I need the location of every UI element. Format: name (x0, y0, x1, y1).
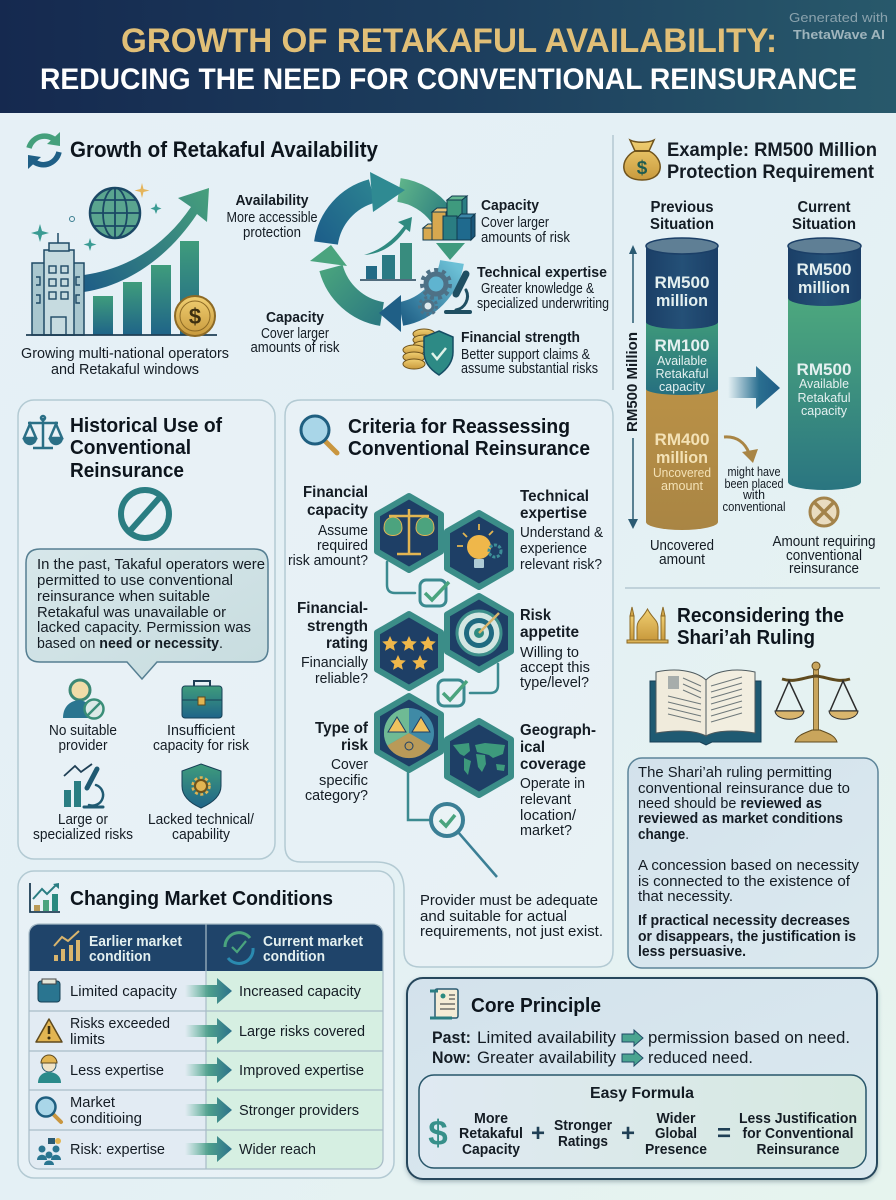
cylinder: previous situation: RM100 (654, 336, 710, 355)
cycle labels: assume substantial risks (461, 361, 598, 377)
heading (677, 605, 844, 649)
term: capacity: Retakaful (459, 1126, 523, 1142)
note: might have been placed: might have (728, 465, 781, 479)
right criteria labels: type/level? (520, 675, 589, 691)
text box: conventional reinsurance due to (638, 781, 850, 797)
label: capability (172, 827, 231, 843)
conclusion text: Provider must be adequate (420, 893, 598, 909)
hexagon: type of risk (377, 696, 441, 770)
text box: that necessity. (638, 889, 733, 905)
panel: changing market conditions (18, 871, 394, 1178)
check badge (438, 680, 467, 706)
statement: now: Now: (432, 1049, 471, 1067)
row 3 icon: worker (38, 1055, 61, 1083)
plus: + (531, 1120, 545, 1147)
hexagon: technical expertise (447, 513, 511, 587)
icon: capacity blocks (423, 196, 475, 240)
icon: scales (24, 416, 62, 448)
speech bubble: permitted to use conventional (37, 573, 233, 589)
cylinder: current situation: capacity (801, 403, 847, 418)
label: Insufficient (167, 723, 235, 739)
column heading: current (792, 199, 856, 233)
term: ratings: Ratings (558, 1134, 608, 1150)
illustration: open book (650, 670, 761, 745)
heading: Reinsurance (70, 460, 184, 482)
panel: RM500 million example (624, 139, 877, 577)
icon: refresh arrows (28, 132, 60, 169)
label: uncovered amount (650, 538, 714, 568)
row 5 text: Wider reach (239, 1142, 316, 1158)
row 2 text: Risks exceeded (70, 1016, 170, 1032)
note: might have been placed: with (742, 488, 765, 502)
illustration: rising bars, building, globe: $ (189, 304, 201, 329)
statement: now (432, 1049, 753, 1067)
heading: Criteria for Reassessing (348, 416, 570, 438)
cylinder: previous situation: RM400 (654, 430, 710, 449)
magnifier check (431, 804, 463, 836)
cylinder: previous situation (646, 238, 718, 530)
right criteria labels: Technical (520, 488, 589, 505)
note: might have been placed: conventional (722, 500, 786, 514)
statement: past: Past: (432, 1029, 471, 1047)
left criteria labels: specific (319, 773, 368, 789)
cylinder: current situation: Available (799, 376, 849, 391)
cycle diagram (310, 172, 465, 332)
text box (628, 758, 878, 968)
watermark: ThetaWave AI (793, 27, 885, 42)
row 4 text: conditioing (70, 1111, 142, 1127)
header icon: current (225, 933, 253, 963)
cycle labels: amounts of risk (481, 230, 571, 246)
icon: money bag: $ (637, 158, 648, 179)
label: uncovered amount: Uncovered (650, 538, 714, 554)
left criteria labels: capacity (307, 502, 368, 519)
text box: is connected to the existence of (638, 874, 851, 890)
icon: chart and microscope (64, 764, 103, 807)
label: Large or (58, 812, 108, 828)
label: provider (58, 738, 108, 754)
speech bubble: Retakaful was unavailable or (37, 605, 226, 621)
cylinder: current situation: RM500 (796, 360, 852, 379)
cylinder: previous situation: Available (657, 353, 707, 368)
text box: If practical necessity decreases (638, 913, 850, 929)
icon: magnifier (301, 416, 337, 453)
speech bubble: reinsurance when suitable (37, 589, 210, 605)
cylinder: current situation: Retakaful (798, 390, 851, 405)
icon: gears and microscope (420, 270, 470, 314)
row 3 text: Less expertise (70, 1063, 164, 1079)
statement: past: Limited availability (477, 1029, 617, 1047)
heading: Protection Requirement (667, 161, 874, 183)
text box: A concession based on necessity (638, 858, 860, 874)
label: amount requiring conventional reinsurance (772, 534, 876, 577)
equals: = (717, 1120, 731, 1147)
cycle labels: Greater knowledge & (481, 281, 594, 297)
formula box: Easy Formula (590, 1085, 694, 1102)
icon: gear shield (182, 764, 221, 808)
arrow: gold curve (724, 437, 758, 463)
column heading: previous (650, 199, 714, 233)
left criteria labels: Financial (303, 484, 368, 501)
term: presence: Global (655, 1126, 697, 1142)
left criteria labels: Financially (301, 655, 369, 671)
check badge (420, 580, 449, 606)
result: for Conventional (742, 1126, 854, 1142)
right criteria labels: Willing to (520, 645, 579, 661)
result (739, 1111, 857, 1158)
cylinder: previous situation: Retakaful (656, 366, 709, 381)
icon: mosque (627, 607, 668, 643)
text box: change. (638, 827, 689, 843)
left criteria labels: risk amount? (288, 553, 368, 569)
column heading: current: Situation (792, 216, 856, 233)
cycle labels: Availability (236, 193, 308, 209)
row 1 arrow (185, 978, 232, 1004)
hexagon: financial capacity (377, 496, 441, 570)
icon: briefcase (182, 681, 222, 718)
right criteria labels: experience (520, 541, 587, 557)
note: might have been placed: been placed (724, 477, 784, 491)
right criteria labels: coverage (520, 756, 586, 773)
term: ratings: Stronger (554, 1118, 612, 1134)
text box: or disappears, the justification is (638, 929, 856, 945)
label (33, 812, 133, 843)
left criteria labels: reliable? (315, 671, 368, 687)
term: capacity: More (474, 1111, 508, 1127)
row 1 text: Increased capacity (239, 984, 362, 1000)
row 5 text (70, 1142, 316, 1158)
hexagon: risk appetite (447, 596, 511, 670)
column heading: current: Current (798, 199, 851, 216)
cycle labels: amounts of risk (250, 340, 340, 356)
row 3 arrow (185, 1057, 232, 1083)
title line 1: GROWTH OF RETAKAFUL AVAILABILITY: (121, 22, 777, 60)
header text: current (263, 934, 363, 965)
panel: criteria for reassessing (285, 400, 613, 967)
dimension arrow: RM500 million (624, 245, 641, 529)
column heading: previous: Situation (650, 216, 714, 233)
hexagon: financial-strength rating (377, 614, 441, 688)
icon: dollar: $ (428, 1114, 448, 1153)
heading: Core Principle (471, 995, 601, 1017)
right criteria labels: accept this (520, 660, 590, 676)
cycle labels: Capacity (266, 310, 324, 326)
comparison table (29, 924, 383, 1169)
panel: core principle (407, 978, 877, 1179)
icon: no provider (63, 680, 104, 718)
connector lines (387, 562, 498, 877)
header text: current: Current market (263, 934, 363, 950)
cycle labels (226, 193, 609, 377)
text box: less persuasive. (638, 944, 746, 960)
header text: earlier: Earlier market (89, 934, 182, 950)
panel: growth of retakaful availability (21, 132, 609, 378)
left criteria labels: risk (341, 737, 368, 754)
note: might have been placed (722, 465, 786, 514)
cycle labels: Cover larger (481, 215, 549, 231)
heading: Conventional Reinsurance (348, 438, 590, 460)
result: Less Justification (739, 1111, 857, 1127)
row 4 text: Market (70, 1095, 115, 1111)
left criteria labels: category? (305, 788, 368, 804)
row 2 text: limits (70, 1032, 105, 1048)
cycle labels: Better support claims & (461, 347, 590, 363)
header banner (0, 0, 896, 113)
term: ratings (554, 1118, 612, 1150)
left criteria labels: Type of (315, 720, 369, 737)
text box: The Shari’ah ruling permitting (638, 765, 832, 781)
statement: past: permission based on need. (648, 1029, 850, 1047)
right criteria labels: location/ (520, 808, 577, 824)
label (148, 812, 255, 843)
label: specialized risks (33, 827, 133, 843)
icon: money bag (624, 140, 660, 180)
row 4 arrow (185, 1097, 232, 1123)
left criteria labels: Assume (318, 523, 368, 539)
conclusion text: and suitable for actual (420, 909, 567, 925)
right criteria labels: Operate in (520, 776, 585, 792)
heading: Example: RM500 Million (667, 139, 877, 161)
right criteria labels: market? (520, 823, 572, 839)
cycle labels: protection (243, 225, 301, 241)
conclusion text: requirements, not just exist. (420, 924, 603, 940)
icon: crossed circle (810, 498, 838, 526)
speech bubble: lacked capacity. Permission was (37, 620, 251, 636)
label: capacity for risk (153, 738, 250, 754)
cycle labels: Cover larger (261, 326, 329, 342)
cylinder: previous situation: Uncovered (653, 465, 711, 480)
formula box (419, 1075, 866, 1168)
cycle labels: specialized underwriting (477, 296, 609, 312)
row 1 icon: wallet (38, 979, 60, 1002)
cylinder: previous situation: RM500 (654, 273, 710, 292)
caption: and Retakaful windows (51, 362, 199, 378)
caption: Growing multi-national operators (21, 346, 229, 362)
speech bubble (26, 549, 268, 679)
conclusion text (420, 893, 603, 940)
term: capacity (459, 1111, 523, 1158)
row 3 text: Improved expertise (239, 1063, 364, 1079)
term: presence: Presence (645, 1142, 707, 1158)
right criteria labels: relevant (520, 792, 571, 808)
speech bubble: In the past, Takaful operators were (37, 557, 265, 573)
statement: now: reduced need. (648, 1049, 753, 1067)
header text: earlier (89, 934, 182, 965)
cylinder: previous situation: million (656, 291, 708, 310)
cylinder: current situation: RM500 (796, 260, 852, 279)
cylinder: previous situation: amount (661, 478, 703, 493)
label: amount requiring conventional reinsurance: conventional (786, 548, 862, 564)
heading (70, 415, 222, 482)
row 1 text: Limited capacity (70, 984, 178, 1000)
hexagon: geographical coverage (447, 721, 511, 795)
arrow: previous to current (728, 366, 780, 409)
statement: past (432, 1029, 850, 1047)
row 5 text: Risk: expertise (70, 1142, 165, 1158)
term: capacity: Capacity (462, 1142, 520, 1158)
row 4 text (70, 1095, 359, 1127)
caption (21, 346, 229, 378)
right criteria labels: Understand & (520, 525, 603, 541)
row 2 text: Large risks covered (239, 1024, 365, 1040)
heading: Conventional (70, 437, 191, 459)
icon: scroll (430, 989, 458, 1018)
dimension arrow: RM500 million: RM500 Million (624, 332, 641, 432)
row 2 arrow (185, 1018, 232, 1044)
row 5 icon: people (37, 1138, 61, 1165)
left criteria labels (288, 484, 369, 804)
heading: Reconsidering the (677, 605, 844, 627)
heading: Historical Use of (70, 415, 222, 437)
speech bubble: based on need or necessity. (37, 636, 223, 652)
plus: + (621, 1120, 635, 1147)
icon: coins and shield (403, 329, 453, 375)
label: No suitable (49, 723, 117, 739)
right criteria labels: ical (520, 739, 545, 756)
cycle labels: Capacity (481, 198, 539, 214)
right criteria labels: relevant risk? (520, 557, 602, 573)
heading (667, 139, 877, 183)
cylinder: previous situation: capacity (659, 379, 705, 394)
term: presence: Wider (656, 1111, 696, 1127)
left criteria labels: Cover (331, 757, 368, 773)
label: Lacked technical/ (148, 812, 255, 828)
row 2 icon: warning (36, 1019, 62, 1042)
left criteria labels: Financial- (297, 600, 368, 617)
label: uncovered amount: amount (659, 552, 705, 568)
term: presence (645, 1111, 707, 1158)
heading: Shari’ah Ruling (677, 627, 815, 649)
cycle labels: Technical expertise (477, 265, 607, 281)
statement: now: Greater availability (477, 1049, 617, 1067)
row 4 icon: magnifier (36, 1098, 61, 1122)
row 5 arrow (185, 1136, 232, 1162)
panel: reconsidering the shari'ah ruling (627, 605, 878, 968)
illustration: rising bars, building, globe (26, 183, 217, 336)
left criteria labels: strength (307, 618, 368, 635)
right criteria labels: appetite (520, 624, 579, 641)
label (153, 723, 250, 754)
cycle labels: Financial strength (461, 330, 580, 346)
label: amount requiring conventional reinsurance: Amount requiring (772, 534, 876, 550)
heading: Growth of Retakaful Availability (70, 137, 379, 162)
panel: historical use of conventional reinsurance (18, 400, 275, 859)
cylinder: current situation (788, 238, 861, 490)
row 3 text (70, 1063, 364, 1079)
column heading: previous: Previous (650, 199, 714, 216)
label: amount requiring conventional reinsurance: reinsurance (789, 561, 859, 577)
cycle labels: More accessible (226, 210, 318, 226)
text box: reviewed as market conditions (638, 811, 843, 827)
illustration: scales (775, 662, 858, 742)
left criteria labels: rating (326, 635, 368, 652)
label (49, 723, 117, 754)
icon: chart (30, 883, 60, 912)
header icon: earlier (54, 931, 80, 961)
watermark (789, 10, 888, 42)
result: Reinsurance (756, 1142, 840, 1158)
left criteria labels: required (317, 538, 368, 554)
title line 2: REDUCING THE NEED FOR CONVENTIONAL REINSURANCE (40, 63, 857, 96)
watermark: Generated with (789, 10, 888, 25)
row 1 text (70, 984, 362, 1000)
cylinder: current situation: million (798, 278, 850, 297)
text box: need should be reviewed as (638, 796, 822, 812)
right criteria labels: Risk (520, 607, 551, 624)
right criteria labels: expertise (520, 505, 587, 522)
row 4 text: Stronger providers (239, 1103, 359, 1119)
heading (348, 416, 590, 460)
row 2 text (70, 1016, 365, 1048)
header text: current: condition (263, 949, 325, 965)
cylinder: previous situation: million (656, 448, 708, 467)
right criteria labels: Geograph- (520, 722, 596, 739)
heading: Changing Market Conditions (70, 888, 333, 910)
right criteria labels (520, 488, 603, 839)
header text: earlier: condition (89, 949, 151, 965)
icon: prohibition sign (121, 490, 169, 538)
